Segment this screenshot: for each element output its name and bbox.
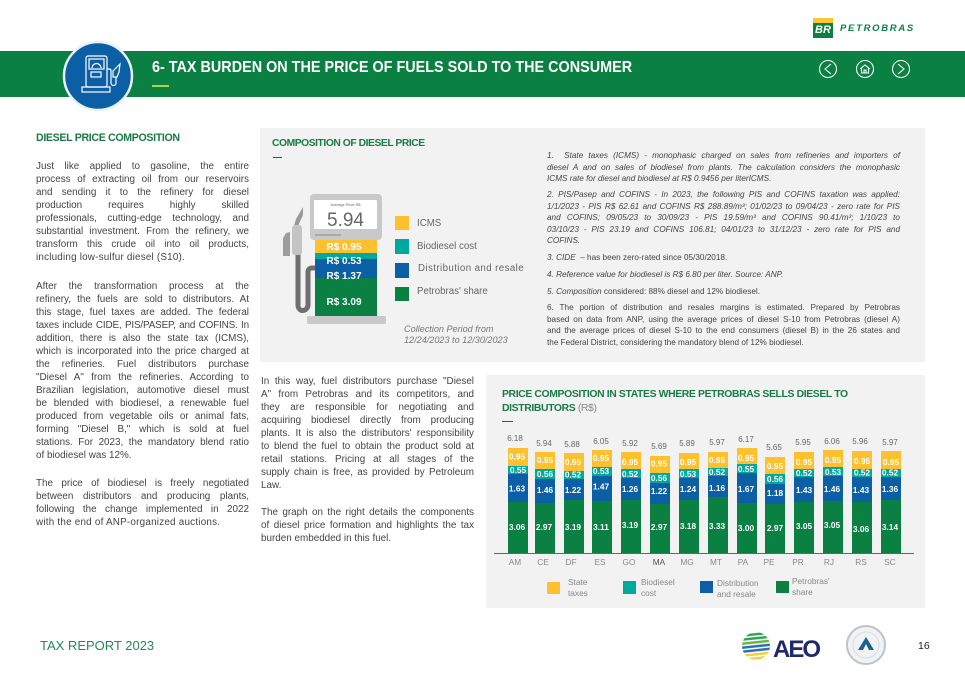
bar chart: price by state: 1.36 (882, 484, 898, 494)
notes: state taxes: 1. State taxes (ICMS) - monophasic charged on sales from refineries and importers of (547, 151, 900, 160)
legend: diesel price (395, 216, 524, 301)
bar chart: price by state: DF (565, 557, 577, 567)
page number: 16 (918, 640, 930, 652)
bar chart: price by state: 0.52 (796, 468, 812, 478)
chart: fuel pump price breakdown: R$ 1.37 (326, 271, 362, 282)
bar chart: price by state: 0.95 (537, 455, 553, 465)
bar chart: price by state: 0.95 (767, 461, 783, 471)
heading: composition of diesel price: COMPOSITION OF DIESEL PRICE (272, 138, 425, 149)
notes: state taxes: ICMS rate for diesel and biodiesel at R$ 0.9456 per literICMS. (547, 174, 771, 183)
bar chart: price by state: 3.11 (593, 522, 609, 532)
text block: middle column paragraph 1: to blend the fuel to obtain the product sold at (261, 441, 474, 452)
bar chart: price by state: 0.53 (680, 469, 696, 479)
heading: price composition by state: DISTRIBUTORS (R$) (502, 402, 597, 414)
chart: fuel pump price breakdown: R$ 3.09 (326, 297, 362, 308)
bar chart: price by state: 3.14 (882, 522, 898, 532)
header band (0, 51, 965, 97)
bar chart: price by state: 5.92 (622, 439, 638, 448)
notes: state taxes (547, 151, 901, 183)
text block: paragraph 1: and sending it to the refinery for diesel (36, 187, 249, 198)
notes: PIS/Pasep and COFINS: 1/1/2023 - PIS R$ 62.61 and COFINS R$ 288.89/m³; 01/02/23 to 09/04/23 - zero rate for PIS (547, 202, 900, 210)
logo: Petrobras: PETROBRAS (840, 23, 915, 34)
bar chart: price by state: 0.95 (509, 452, 525, 462)
text block: paragraph 1: Just like applied to gasoline, the entire (36, 161, 249, 172)
logo: Petrobras (813, 18, 915, 38)
bar chart: price by state: 1.22 (565, 485, 581, 495)
bar chart: price by state: CE (537, 557, 549, 567)
bar chart: price by state: 3.06 (853, 524, 869, 534)
text block: paragraph 3: following the change implemented in 2022 (36, 504, 249, 515)
title: 6- TAX BURDEN ON THE PRICE OF FUELS SOLD TO THE CONSUMER (152, 59, 632, 76)
bar chart: price by state: 0.95 (680, 457, 696, 467)
chart: fuel pump price breakdown: Average Price-R$ (331, 203, 361, 207)
bar chart: price by state: 1.63 (509, 484, 525, 494)
bar chart: price by state: PR (792, 557, 804, 567)
bar chart: price by state: RS (855, 557, 867, 567)
bar chart: price by state: 1.67 (738, 484, 754, 494)
note: collection period (404, 324, 508, 345)
text block: paragraph 2: stations. For 2023, the mandatory blend ratio (36, 437, 249, 448)
notes: PIS/Pasep and COFINS: 2. PIS/Pasep and COFINS - In 2023, the following PIS and COFINS taxation was applied: (547, 190, 900, 199)
text block: middle column paragraph 1 (261, 376, 474, 491)
bar chart: price by state: 0.52 (882, 468, 898, 478)
notes: distribution margins: the Federal District, considering the mandatory blend of 12% biodiesel. (547, 338, 804, 346)
bar chart: price by state: PE (763, 557, 775, 567)
notes: distribution margins: and the average prices of diesel S-10 to the end consumers (diesel B) in the 26 states and (547, 326, 900, 335)
legend: diesel price: Distribution and resale (418, 263, 524, 274)
bar chart: price by state: 2.97 (651, 522, 667, 532)
bar chart: price by state: 0.95 (796, 457, 812, 467)
notes: CIDE, biodiesel and composition: 3. CIDE – has been zero-rated since 05/30/2018. (547, 253, 727, 262)
bar chart: price by state: 2.97 (767, 523, 783, 533)
bar chart: price by state: 1.24 (680, 484, 696, 494)
bar chart: price by state: 1.18 (767, 488, 783, 498)
text block: paragraph 3 (36, 478, 249, 528)
bar chart: price by state: 5.97 (882, 438, 898, 447)
legend: price by state: cost (641, 588, 656, 598)
bar chart: price by state: 5.97 (709, 438, 725, 447)
text block: paragraph 1: professionals, cutting-edge technology, and (36, 213, 249, 224)
notes: CIDE, biodiesel and composition: 5. Composition considered: 88% diesel and 12% biodiesel. (547, 287, 760, 296)
bar chart: price by state: 0.53 (593, 466, 609, 476)
bar chart: price by state: 5.96 (852, 437, 868, 446)
bar chart: price by state: 0.95 (854, 456, 870, 466)
chart: fuel pump price breakdown: R$ 0.53 (326, 256, 362, 267)
panel: composition of diesel price (260, 128, 925, 362)
legend: price by state: State (568, 577, 587, 587)
text block: middle column paragraph 1: A" from Petrobras and its competitors, and (261, 389, 474, 400)
text block: paragraph 1: production requires highly skilled (36, 200, 249, 211)
text block: middle column paragraph 1: they are responsible for negotiating and (261, 402, 474, 413)
bar chart: price by state: ES (594, 557, 606, 567)
bar chart: price by state: 3.18 (680, 521, 696, 531)
notes: distribution margins: 6. The portion of distribution and resales margins is estimated. Prepared by Petrobras (547, 303, 900, 312)
bar chart: price by state: GO (623, 557, 636, 567)
text block: middle column paragraph 1: Law. (261, 480, 281, 491)
bar chart: price by state: 1.43 (853, 485, 869, 495)
text block: paragraph 2: the refineries. Fuel distributors purchase (36, 359, 249, 370)
note: collection period: 12/24/2023 to 12/30/2023 (404, 335, 508, 345)
text block: paragraph 3: between distributors and producing plants, (36, 491, 249, 502)
text block: paragraph 2: be blended with biodiesel, a renewable fuel (36, 398, 249, 409)
legend: diesel price: Petrobras' share (417, 286, 488, 297)
bar chart: price by state: 1.47 (593, 482, 609, 492)
notes: CIDE, biodiesel and composition (547, 253, 783, 296)
bar chart: price by state: 5.94 (536, 439, 552, 448)
bar chart: price by state: 0.56 (767, 474, 783, 484)
text block: middle column paragraph 2 (261, 507, 474, 544)
bar chart: price by state: 1.26 (622, 484, 638, 494)
legend: diesel price: ICMS (417, 218, 441, 229)
legend: price by state (547, 576, 830, 599)
text block: middle column paragraph 1: plants. It is also the distributors' responsibility (261, 428, 474, 439)
bar chart: price by state: 3.33 (709, 521, 725, 531)
footer: report name: TAX REPORT 2023 (40, 638, 154, 653)
bar chart: price by state: PA (738, 557, 749, 567)
legend: price by state: share (792, 587, 813, 597)
text block: paragraph 2: After the transformation process at the (36, 281, 249, 292)
text block: middle column paragraph 1: supply chain is free, as provided by Petroleum (261, 467, 474, 478)
bar chart: price by state: 3.06 (509, 522, 525, 532)
bar chart: price by state: 1.43 (796, 485, 812, 495)
chart: fuel pump price breakdown (283, 194, 386, 324)
notes: PIS/Pasep and COFINS: COFINS. (547, 236, 580, 245)
bar chart: price by state: 5.65 (766, 443, 782, 452)
text block: paragraph 2: this stage, fuel taxes are added. The federal (36, 307, 249, 318)
legend: price by state: and resale (717, 589, 756, 599)
bar chart: price by state: 6.18 (507, 434, 523, 443)
bar chart: price by state: 0.95 (709, 455, 725, 465)
text block: middle column paragraph 1: In this way, fuel distributors purchase "Diesel (261, 376, 474, 387)
bar chart: price by state: RJ (824, 557, 834, 567)
bar chart: price by state: 3.00 (738, 523, 754, 533)
text block: paragraph 3: The price of biodiesel is freely negotiated (36, 478, 249, 489)
bar chart: price by state: 6.05 (593, 437, 609, 446)
notes: distribution margins (547, 303, 900, 346)
notes: CIDE, biodiesel and composition: 4. Reference value for biodiesel is R$ 6.80 per liter. Source: ANP. (547, 270, 783, 279)
text block: middle column paragraph 2: The graph on the right details the components (261, 507, 474, 518)
bar chart: price by state: 2.97 (536, 522, 552, 532)
legend: price by state: taxes (568, 588, 588, 598)
heading: diesel price composition: DIESEL PRICE COMPOSITION (36, 132, 180, 144)
bar chart: price by state: 0.95 (825, 455, 841, 465)
bar chart: price by state: 0.95 (651, 458, 667, 468)
bar chart: price by state: 0.56 (537, 469, 553, 479)
bar chart: price by state: AM (509, 557, 521, 567)
text block: paragraph 1: substantial investment. From the refinery, we (36, 226, 249, 237)
bar chart: price by state: 0.95 (565, 457, 581, 467)
bar chart: price by state: 6.06 (824, 437, 840, 446)
icon: fuel pump badge (62, 40, 134, 112)
bar chart: price by state: MA (653, 557, 666, 567)
notes: state taxes: diesel A and on sales of biodiesel from plants. The calculation considers the monophasic (547, 162, 900, 172)
bar chart: price by state: 0.95 (593, 453, 609, 463)
chart: fuel pump price breakdown: 5.94 (327, 210, 364, 231)
bar chart: price by state: 0.55 (738, 464, 754, 474)
navigation icons (818, 60, 910, 78)
text block: paragraph 3: with the end of ANP-organized auctions. (36, 517, 220, 528)
bar chart: price by state: 0.53 (825, 467, 841, 477)
text block: middle column paragraph 1: acquiring biodiesel directly from producing (261, 415, 474, 426)
notes: PIS/Pasep and COFINS: 03/10/23 - PIS 23.19 and COFINS 106.81; 04/01/23 to 31/12/23 - zero rate for PIS and (547, 224, 900, 234)
bar chart: price by state: 5.69 (651, 442, 667, 451)
bar chart: price by state: 1.16 (709, 483, 725, 493)
bar chart: price by state: 0.95 (622, 457, 638, 467)
bar chart: price by state: 5.88 (564, 440, 580, 449)
legend: price by state: Petrobras' (792, 576, 830, 586)
text block: paragraph 2: addition, there is also the state tax (ICMS), (36, 333, 249, 344)
bar chart: price by state: 0.52 (565, 470, 581, 480)
bar chart: price by state: 5.95 (795, 438, 811, 447)
bar chart: price by state: 1.46 (824, 484, 840, 494)
text block: paragraph 1 (36, 161, 249, 263)
text block: paragraph 1: transform this crude oil into oil products, (36, 239, 249, 250)
legend: diesel price: Biodiesel cost (417, 241, 477, 252)
heading: price composition by state (502, 389, 848, 414)
bar chart: price by state: 6.17 (738, 435, 754, 444)
text block: paragraph 2: Brazilian legislation, automotive diesel must (36, 385, 249, 396)
bar chart: price by state: 3.19 (622, 520, 638, 530)
notes: PIS/Pasep and COFINS: and COFINS; 09/05/23 to 30/09/23 - PIS 19.59/m³ and COFINS 90.41/m³; 1/10/23 to (547, 213, 900, 222)
text block: paragraph 2: which is incorporated into the price charged at (36, 346, 249, 357)
bar chart: price by state: 5.89 (679, 439, 695, 448)
bar chart: price by state: 0.52 (709, 467, 725, 477)
logo: AEO (742, 632, 820, 662)
chart: fuel pump price breakdown: R$ 0.95 (326, 242, 362, 253)
bar chart: price by state: 3.05 (824, 520, 840, 530)
text block: middle column paragraph 1: retail stations. Pricing at all stages of the (261, 454, 474, 465)
text block: paragraph 2: refinery, the fuels are sold to distributors. At (36, 294, 249, 305)
text block: paragraph 1: including low-sulfur diesel (S10). (36, 252, 185, 263)
bar chart: price by state: SC (884, 557, 896, 567)
bar chart: price by state: 0.52 (854, 468, 870, 478)
bar chart: price by state: 0.52 (622, 469, 638, 479)
bar chart: price by state: 0.56 (651, 473, 667, 483)
legend: price by state: Distribution (717, 578, 759, 588)
text block: paragraph 2: produced from vegetable oils or animal fats, (36, 411, 249, 422)
text block: middle column paragraph 2: of diesel price formation and highlights the tax (261, 520, 474, 531)
bar chart: price by state: 0.55 (510, 465, 526, 475)
logo: Petrobras: BR (815, 24, 831, 36)
bar chart: price by state: 1.46 (537, 485, 553, 495)
heading: price composition by state: PRICE COMPOSITION IN STATES WHERE PETROBRAS SELLS DIESEL TO (502, 389, 848, 400)
bar chart: price by state: 3.19 (565, 522, 581, 532)
bar chart: price by state: 0.95 (738, 453, 754, 463)
panel: price composition by state (486, 375, 925, 608)
bar chart: price by state: 1.22 (651, 486, 667, 496)
legend: price by state: Biodiesel (641, 577, 675, 587)
text block: paragraph 2: "Diesel A" from the refineries. According to (36, 372, 249, 383)
notes: PIS/Pasep and COFINS (547, 190, 900, 245)
text block: paragraph 1: process of extracting oil from our reservoirs (36, 174, 249, 185)
text block: paragraph 2: forming "Diesel B," which is sold at fuel (36, 424, 249, 435)
seal: certification (846, 625, 886, 665)
text block: paragraph 2 (36, 281, 249, 461)
notes: distribution margins: based on data from ANP, using the average prices of diesel S-10 from Petrobras (diesel A) (547, 314, 900, 324)
bar chart: price by state: MG (680, 557, 694, 567)
text block: paragraph 2: taxes include CIDE, PIS/PASEP, and COFINS. In (36, 320, 249, 331)
bar chart: price by state (494, 434, 914, 567)
bar chart: price by state: 0.95 (883, 457, 899, 467)
text block: middle column paragraph 2: burden embedded in this fuel. (261, 533, 391, 544)
bar chart: price by state: MT (710, 557, 722, 567)
text block: paragraph 2: of biodiesel was 12%. (36, 450, 132, 461)
note: collection period: Collection Period from (404, 324, 493, 334)
bar chart: price by state: 3.05 (796, 521, 812, 531)
